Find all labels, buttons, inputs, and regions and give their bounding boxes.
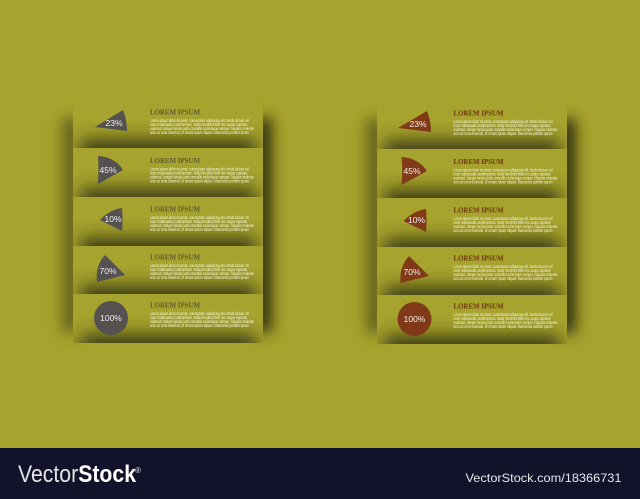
circle 100%: 100% (100, 313, 122, 323)
body text: euismod. Integer lacinia justo convallis scelerisque semper. Aliquam molestie (454, 320, 558, 325)
heading: LOREM IPSUM (454, 302, 504, 310)
row 1 (377, 110, 567, 149)
wedge 45% (98, 156, 123, 184)
body text: nunc malesuada condimentum. Nulla hendrerit felis nec augue egestas (454, 268, 550, 273)
body text (150, 118, 254, 135)
footer logo: VectorStock (18, 461, 136, 488)
body text: arcu ac urna euismod, et ornare ipsum aliquet. Maecenas porttitor ipsum (150, 227, 249, 232)
body text: nunc malesuada condimentum. Nulla hendrerit felis nec augue egestas (454, 172, 550, 177)
wedge 10%: 10% (104, 214, 122, 224)
body text: Lorem ipsum dolor sit amet, consectetur adipiscing elit. Morbi dictum vel (150, 118, 249, 123)
body text: Lorem ipsum dolor sit amet, consectetur adipiscing elit. Morbi dictum vel (454, 119, 553, 124)
body text: Lorem ipsum dolor sit amet, consectetur adipiscing elit. Morbi dictum vel (150, 263, 249, 268)
heading: LOREM IPSUM (150, 252, 200, 262)
body text: nunc malesuada condimentum. Nulla hendrerit felis nec augue egestas (454, 123, 550, 128)
body text (150, 215, 254, 232)
row 3 (377, 208, 567, 247)
body text: arcu ac urna euismod, et ornare ipsum aliquet. Maecenas porttitor ipsum (454, 228, 553, 233)
heading: LOREM IPSUM (454, 108, 504, 118)
body text: euismod. Integer lacinia justo convallis scelerisque semper. Aliquam molestie (454, 224, 558, 229)
body text: Lorem ipsum dolor sit amet, consectetur adipiscing elit. Morbi dictum vel (150, 167, 249, 172)
body text (454, 216, 558, 233)
panel: left column (62, 104, 272, 365)
wedge 23%: 23% (105, 118, 123, 128)
body text: Lorem ipsum dolor sit amet, consectetur adipiscing elit. Morbi dictum vel (454, 168, 553, 173)
body text: arcu ac urna euismod, et ornare ipsum aliquet. Maecenas porttitor ipsum (454, 324, 553, 329)
registered mark: ® (135, 466, 141, 475)
row 5 (377, 302, 567, 344)
body text (454, 168, 558, 185)
body text: Lorem ipsum dolor sit amet, consectetur adipiscing elit. Morbi dictum vel (454, 312, 553, 317)
row 2 (73, 156, 263, 197)
body text: nunc malesuada condimentum. Nulla hendrerit felis nec augue egestas (454, 220, 550, 225)
wedge 45%: 45% (99, 165, 117, 175)
body text: nunc malesuada condimentum. Nulla hendrerit felis nec augue egestas (150, 171, 247, 176)
wedge 70% (97, 255, 125, 282)
wedge 70%: 70% (99, 266, 117, 276)
body text: nunc malesuada condimentum. Nulla hendrerit felis nec augue egestas (150, 315, 247, 320)
body text: nunc malesuada condimentum. Nulla hendrerit felis nec augue egestas (150, 219, 247, 224)
body text: euismod. Integer lacinia justo convallis scelerisque semper. Aliquam molestie (454, 272, 558, 277)
body text: euismod. Integer lacinia justo convallis scelerisque semper. Aliquam molestie (150, 175, 254, 180)
body text: arcu ac urna euismod, et ornare ipsum aliquet. Maecenas porttitor ipsum (454, 180, 553, 185)
wedge 10%: 10% (408, 215, 425, 225)
body text: nunc malesuada condimentum. Nulla hendrerit felis nec augue egestas (150, 122, 247, 127)
body text (150, 311, 254, 328)
heading: LOREM IPSUM (150, 300, 200, 310)
heading: LOREM IPSUM (454, 206, 504, 214)
body text: arcu ac urna euismod, et ornare ipsum aliquet. Maecenas porttitor ipsum (150, 275, 249, 280)
body text: euismod. Integer lacinia justo convallis scelerisque semper. Aliquam molestie (454, 127, 558, 132)
body text: euismod. Integer lacinia justo convallis scelerisque semper. Aliquam molestie (454, 176, 558, 181)
body text: Lorem ipsum dolor sit amet, consectetur adipiscing elit. Morbi dictum vel (454, 264, 553, 269)
wedge 70% (400, 256, 429, 283)
circle 100% (94, 301, 128, 335)
wedge 45% (402, 157, 427, 185)
body text: nunc malesuada condimentum. Nulla hendrerit felis nec augue egestas (150, 267, 247, 272)
body text (454, 119, 558, 136)
wedge 10% (404, 209, 426, 232)
body text (150, 167, 254, 184)
body text: arcu ac urna euismod, et ornare ipsum aliquet. Maecenas porttitor ipsum (150, 323, 249, 328)
body text: Lorem ipsum dolor sit amet, consectetur adipiscing elit. Morbi dictum vel (150, 311, 249, 316)
circle 100%: 100% (404, 314, 426, 324)
body text: euismod. Integer lacinia justo convallis scelerisque semper. Aliquam molestie (150, 319, 254, 324)
heading: LOREM IPSUM (150, 108, 200, 116)
body text: nunc malesuada condimentum. Nulla hendrerit felis nec augue egestas (454, 316, 550, 321)
heading: LOREM IPSUM (150, 156, 200, 165)
wedge 23% (398, 111, 431, 132)
body text (150, 263, 254, 280)
row 4 (377, 256, 567, 295)
wedge 70%: 70% (403, 267, 421, 277)
body text: Lorem ipsum dolor sit amet, consectetur adipiscing elit. Morbi dictum vel (150, 215, 249, 220)
row 1 (73, 110, 263, 148)
row 2 (377, 157, 567, 198)
heading: LOREM IPSUM (454, 157, 504, 166)
footer bar (0, 448, 640, 499)
body text: arcu ac urna euismod, et ornare ipsum aliquet. Maecenas porttitor ipsum (454, 131, 553, 136)
wedge 23%: 23% (409, 119, 427, 129)
heading: LOREM IPSUM (150, 204, 200, 214)
row 5 (73, 301, 263, 343)
panel: right column (366, 105, 576, 366)
heading: LOREM IPSUM (454, 254, 504, 262)
wedge 45%: 45% (403, 166, 421, 176)
body text: Lorem ipsum dolor sit amet, consectetur adipiscing elit. Morbi dictum vel (454, 216, 553, 221)
wedge 23% (95, 110, 127, 131)
circle 100% (398, 302, 432, 336)
body text: arcu ac urna euismod, et ornare ipsum aliquet. Maecenas porttitor ipsum (150, 130, 249, 135)
footer image id: VectorStock.com/18366731 (466, 471, 622, 485)
row 3 (73, 206, 263, 246)
body text: euismod. Integer lacinia justo convallis scelerisque semper. Aliquam molestie (150, 223, 254, 228)
body text: euismod. Integer lacinia justo convallis scelerisque semper. Aliquam molestie (150, 271, 254, 276)
body text: arcu ac urna euismod, et ornare ipsum aliquet. Maecenas porttitor ipsum (454, 276, 553, 281)
body text (454, 312, 558, 329)
row 4 (73, 254, 263, 294)
wedge 10% (100, 208, 122, 231)
body text: arcu ac urna euismod, et ornare ipsum aliquet. Maecenas porttitor ipsum (150, 179, 249, 184)
body text (454, 264, 558, 281)
body text: euismod. Integer lacinia justo convallis scelerisque semper. Aliquam molestie (150, 126, 254, 131)
